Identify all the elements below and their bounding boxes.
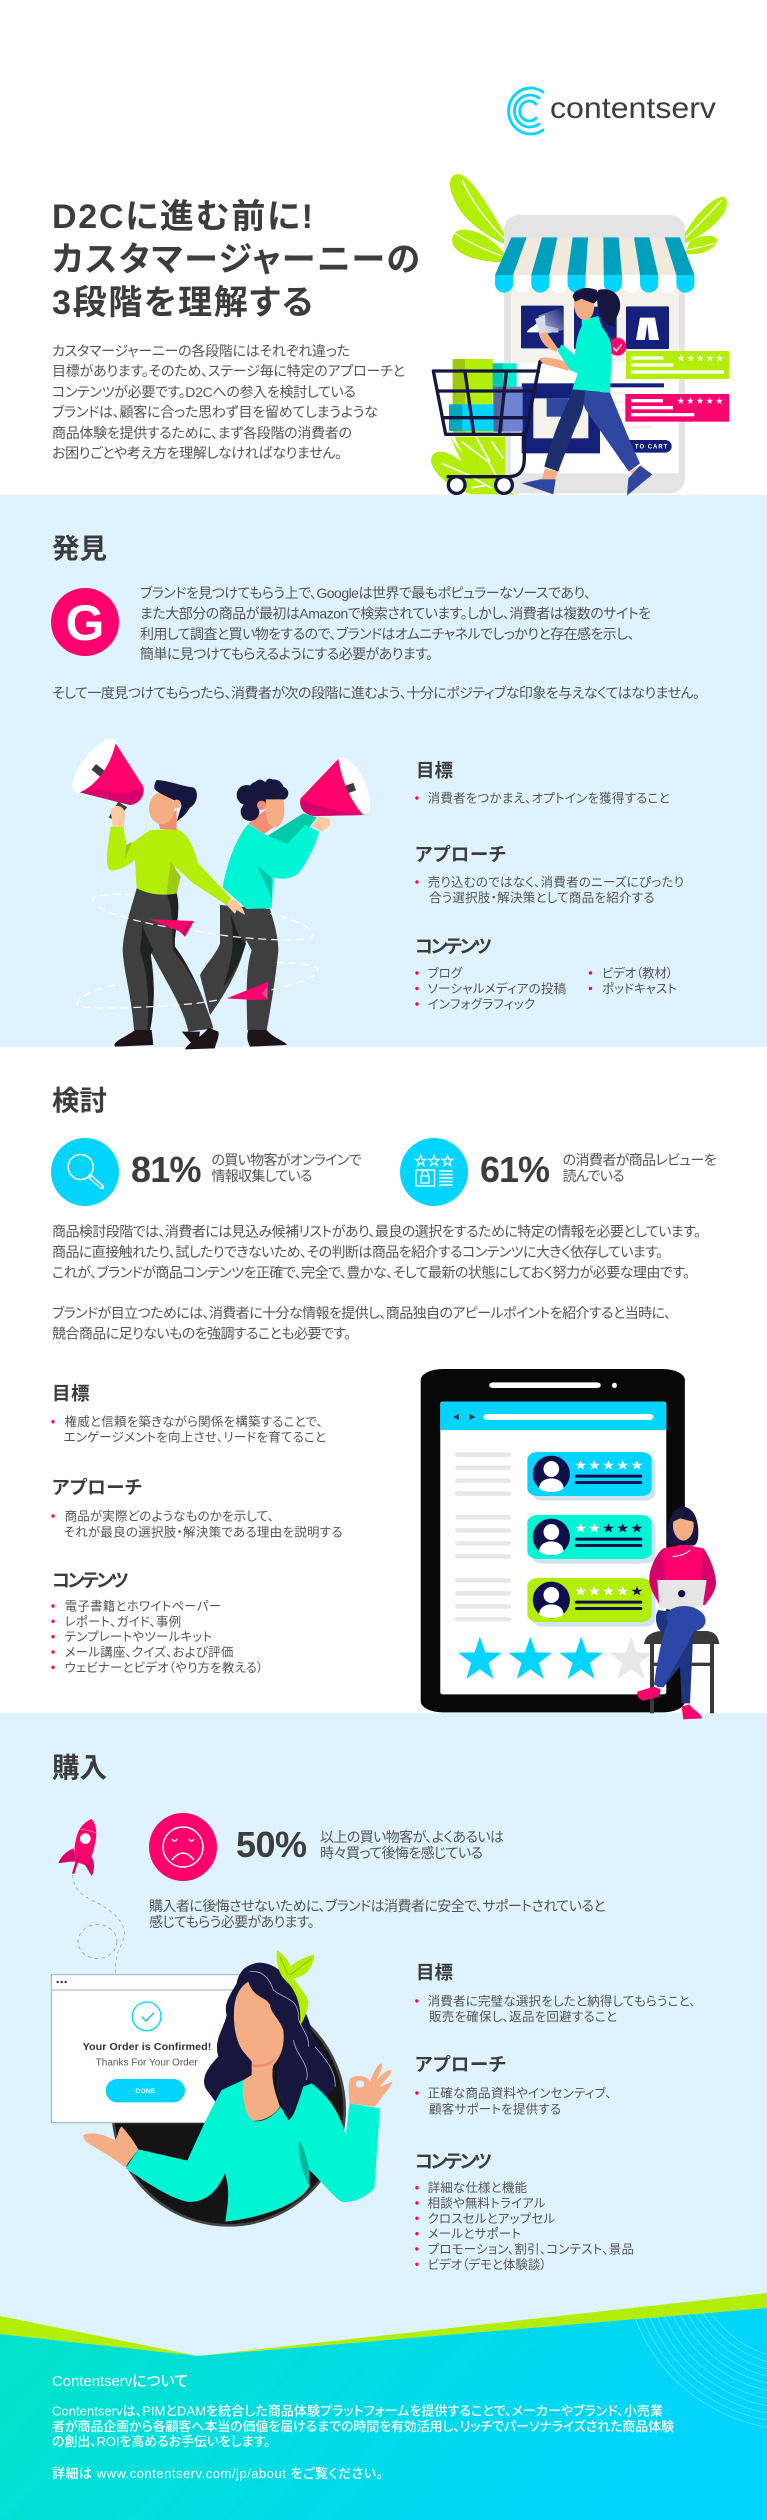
- block: content purchase: 詳細な仕様と機能: [428, 2180, 527, 2195]
- order window: [51, 1975, 243, 2123]
- footer text: 詳細は www.contentserv.com/jp/about をご覧ください。: [52, 2466, 383, 2481]
- block: content purchase: クロスセルとアップセル: [428, 2212, 555, 2226]
- illustration: shopper and store: ADD TO CART: [616, 444, 668, 450]
- circle backdrop: [113, 1993, 345, 2225]
- logo: contentserv: [509, 88, 716, 134]
- block: goals purchase: 販売を確保し、返品を回避すること: [429, 2009, 617, 2024]
- footer text: の創出、ROIを高めるお手伝いをします。: [52, 2434, 270, 2449]
- stat: 81%: [51, 1138, 362, 1206]
- title: D2Cに進む前に!: [52, 198, 313, 236]
- block: approach discovery: 合う選択肢・解決策として商品を紹介する: [429, 890, 654, 905]
- block: content discovery: ビデオ（教材）: [602, 966, 673, 980]
- block: approach discovery: [415, 844, 684, 905]
- consideration text: 商品に直接触れたり、試したりできないため、その判断は商品を紹介するコンテンツに大きく依存しています。: [52, 1244, 663, 1260]
- block: goals purchase: 目標: [416, 1962, 453, 1983]
- footer panel: [0, 2308, 767, 2520]
- awning: [495, 237, 694, 275]
- block: content discovery: ブログ: [428, 966, 463, 980]
- block: content discovery: インフォグラフィック: [428, 998, 535, 1012]
- stat: 61%: の消費者が商品レビューを: [563, 1152, 717, 1168]
- block: content discovery: ソーシャルメディアの投稿: [428, 981, 566, 996]
- discovery text: ブランドを見つけてもらう上で、Googleは世界で最もポピュラーなソースであり、: [140, 585, 591, 601]
- consideration text: 競合商品に足りないものを強調することも必要です。: [52, 1326, 351, 1342]
- block: content purchase: コンテンツ: [415, 2151, 492, 2172]
- block: goals purchase: [415, 1962, 696, 2024]
- block: content consideration: テンプレートやツールキット: [65, 1630, 212, 1644]
- purchase text: 購入者に後悔させないために、ブランドは消費者に安全で、サポートされていると: [149, 1898, 606, 1914]
- woman: [83, 1950, 393, 2222]
- intro text: コンテンツが必要です。D2Cへの参入を検討している: [52, 384, 356, 400]
- consideration text: ブランドが目立つためには、消費者に十分な情報を提供し、商品独自のアピールポイントを紹介すると当時に、: [52, 1305, 671, 1321]
- panel: discovery background: [0, 495, 767, 1047]
- left man: [107, 780, 245, 1049]
- plant: [431, 435, 518, 494]
- leaves: [450, 174, 727, 262]
- block: goals consideration: 権威と信頼を築きながら関係を構築することで、: [65, 1414, 323, 1429]
- cart goods: [453, 359, 493, 432]
- stat: 61%: 61%: [480, 1149, 550, 1190]
- title: 3段階を理解する: [52, 284, 313, 322]
- icon: G: G: [66, 595, 104, 651]
- main product: [522, 383, 600, 453]
- cart: [433, 362, 548, 493]
- block: content consideration: [51, 1570, 263, 1675]
- stat: 50%: 以上の買い物客が、よくあるいは: [320, 1829, 504, 1845]
- block: goals discovery: 消費者をつかまえ、オプトインを獲得すること: [428, 790, 670, 806]
- stat: 81%: 81%: [131, 1149, 202, 1190]
- icon: G: [51, 588, 119, 656]
- block: content discovery: [415, 936, 677, 1012]
- footer text: [52, 2373, 674, 2481]
- paper planes: [150, 919, 268, 1000]
- block: content purchase: プロモーション、割引、コンテスト、景品: [428, 2242, 634, 2256]
- discovery text: 利用して調査と買い物をするので、ブランドはオムニチャネルでしっかりと存在感を示し、: [140, 626, 634, 642]
- block: content purchase: [415, 2151, 634, 2272]
- block: goals discovery: 目標: [416, 760, 453, 781]
- dashed orbits: [77, 894, 318, 1008]
- block: content consideration: メール講座、クイズ、および評価: [65, 1644, 233, 1660]
- block: approach purchase: [415, 2054, 612, 2116]
- store: [504, 215, 685, 493]
- heading: consideration: 検討: [52, 1085, 107, 1116]
- heading: discovery: 発見: [52, 533, 107, 564]
- illustration: shopper and store: [431, 174, 729, 496]
- illustration: tablet with reviews: [421, 1369, 719, 1719]
- stat: 50%: 50%: [236, 1824, 307, 1865]
- stat: 50%: [149, 1813, 504, 1881]
- illustration: men with megaphones: [65, 732, 377, 1049]
- intro text: カスタマージャーニーの各段階にはそれぞれ違った: [52, 343, 350, 359]
- logo: contentserv: contentserv: [550, 92, 716, 125]
- purchase text: [149, 1898, 606, 1930]
- intro text: 商品体験を提供するために、まず各段階の消費者の: [52, 425, 352, 441]
- discovery text: 簡単に見つけてもらえるようにする必要があります。: [140, 646, 433, 662]
- block: goals consideration: [51, 1383, 326, 1444]
- intro text: [52, 343, 405, 461]
- footer text: 者が商品企画から各顧客へ本当の価値を届けるまでの時間を有効活用し、リッチでパーソナライズされた商品体験: [52, 2419, 674, 2434]
- intro text: 目標があります。そのため、ステージ毎に特定のアプローチと: [52, 363, 405, 379]
- title: [52, 198, 420, 322]
- block: approach consideration: アプローチ: [52, 1477, 142, 1498]
- block: goals purchase: 消費者に完璧な選択をしたと納得してもらうこと、: [428, 1994, 696, 2008]
- block: content discovery: ポッドキャスト: [602, 982, 677, 996]
- panel: purchase background: [0, 1713, 767, 2520]
- block: content consideration: レポート、ガイド、事例: [65, 1615, 181, 1629]
- consideration text: 商品検討段階では、消費者には見込み候補リストがあり、最良の選択をするために特定の情報を必要としています。: [52, 1224, 701, 1240]
- intro text: ブランドは、顧客に合った思わず目を留めてしまうような: [52, 404, 378, 420]
- block: content discovery: コンテンツ: [415, 936, 492, 957]
- big stars: [458, 1637, 653, 1679]
- stat: 61%: 読んでいる: [563, 1168, 625, 1184]
- block: approach consideration: 商品が実際どのようなものかを示して、: [65, 1508, 274, 1524]
- block: approach consideration: それが最良の選択肢・解決策である理由を説明する: [64, 1524, 342, 1540]
- intro text: お困りごとや考え方を理解しなければなりません。: [52, 445, 342, 461]
- discovery text: [52, 585, 700, 701]
- right megaphone: [300, 753, 377, 819]
- title: カスタマージャーニーの: [52, 241, 420, 279]
- review card 2: [527, 1515, 656, 1564]
- product tiles: [521, 306, 564, 348]
- block: content consideration: コンテンツ: [52, 1570, 129, 1591]
- heading: purchase: 購入: [52, 1752, 107, 1783]
- block: content purchase: 相談や無料トライアル: [428, 2196, 546, 2210]
- purchase text: 感じてもらう必要があります。: [149, 1914, 315, 1930]
- right man: [200, 779, 331, 1047]
- woman: [597, 289, 620, 327]
- discovery text: また大部分の商品が最初はAmazonで検索されています。しかし、消費者は複数のサイトを: [140, 606, 651, 622]
- stat: 81%: の買い物客がオンラインで: [212, 1152, 362, 1168]
- illustration: order confirmation and woman: [51, 1950, 393, 2225]
- footer text: Contentservについて: [52, 2373, 188, 2390]
- block: approach purchase: 顧客サポートを提供する: [429, 2102, 561, 2116]
- block: content consideration: 電子書籍とホワイトペーパー: [65, 1598, 221, 1614]
- block: approach purchase: 正確な商品資料やインセンティブ、: [428, 2086, 612, 2100]
- block: goals consideration: 目標: [52, 1383, 90, 1404]
- block: approach discovery: アプローチ: [415, 844, 506, 865]
- review card 1: [527, 1452, 656, 1501]
- block: content purchase: メールとサポート: [428, 2227, 521, 2241]
- icon: rocket with dashed trail: [58, 1819, 124, 1992]
- order window: DONE: [135, 2088, 156, 2095]
- text lines: [455, 1452, 511, 1622]
- block: approach discovery: 売り込むのではなく、消費者のニーズにぴったり: [428, 874, 684, 890]
- stat: 81%: 情報収集している: [212, 1168, 312, 1184]
- stat: 61%: [400, 1138, 717, 1206]
- order window: Your Order is Confirmed!: [83, 2042, 211, 2053]
- tablet: [421, 1369, 685, 1712]
- block: goals discovery: [415, 760, 670, 806]
- block: content purchase: ビデオ（デモと体験談）: [428, 2257, 547, 2272]
- footer band: lime accent: [0, 2293, 767, 2356]
- block: goals consideration: エンゲージメントを向上させ、リードを育てること: [64, 1430, 326, 1444]
- woman with laptop: [637, 1507, 719, 1719]
- consideration text: これが、ブランドが商品コンテンツを正確で、完全で、豊かな、そして最新の状態にしておく努力が必要な理由です。: [52, 1264, 690, 1280]
- block: approach consideration: [51, 1477, 343, 1540]
- discovery text: そして一度見つけてもらったら、消費者が次の段階に進むよう、十分にポジティブな印象を与えなくてはなりません。: [52, 685, 700, 701]
- footer text: Contentservは、PIMとDAMを統合した商品体験プラットフォームを提供することで、メーカーやブランド、小売業: [52, 2404, 663, 2418]
- add to cart: [622, 440, 672, 453]
- block: approach purchase: アプローチ: [415, 2054, 506, 2075]
- order window: Thanks For Your Order: [96, 2057, 198, 2068]
- review cards: [626, 351, 729, 379]
- review card 3: [527, 1578, 656, 1627]
- left megaphone: [65, 732, 144, 805]
- consideration text: [52, 1224, 701, 1342]
- block: content consideration: ウェビナーとビデオ（やり方を教える）: [65, 1660, 263, 1675]
- stat: 50%: 時々買って後悔を感じている: [320, 1845, 483, 1861]
